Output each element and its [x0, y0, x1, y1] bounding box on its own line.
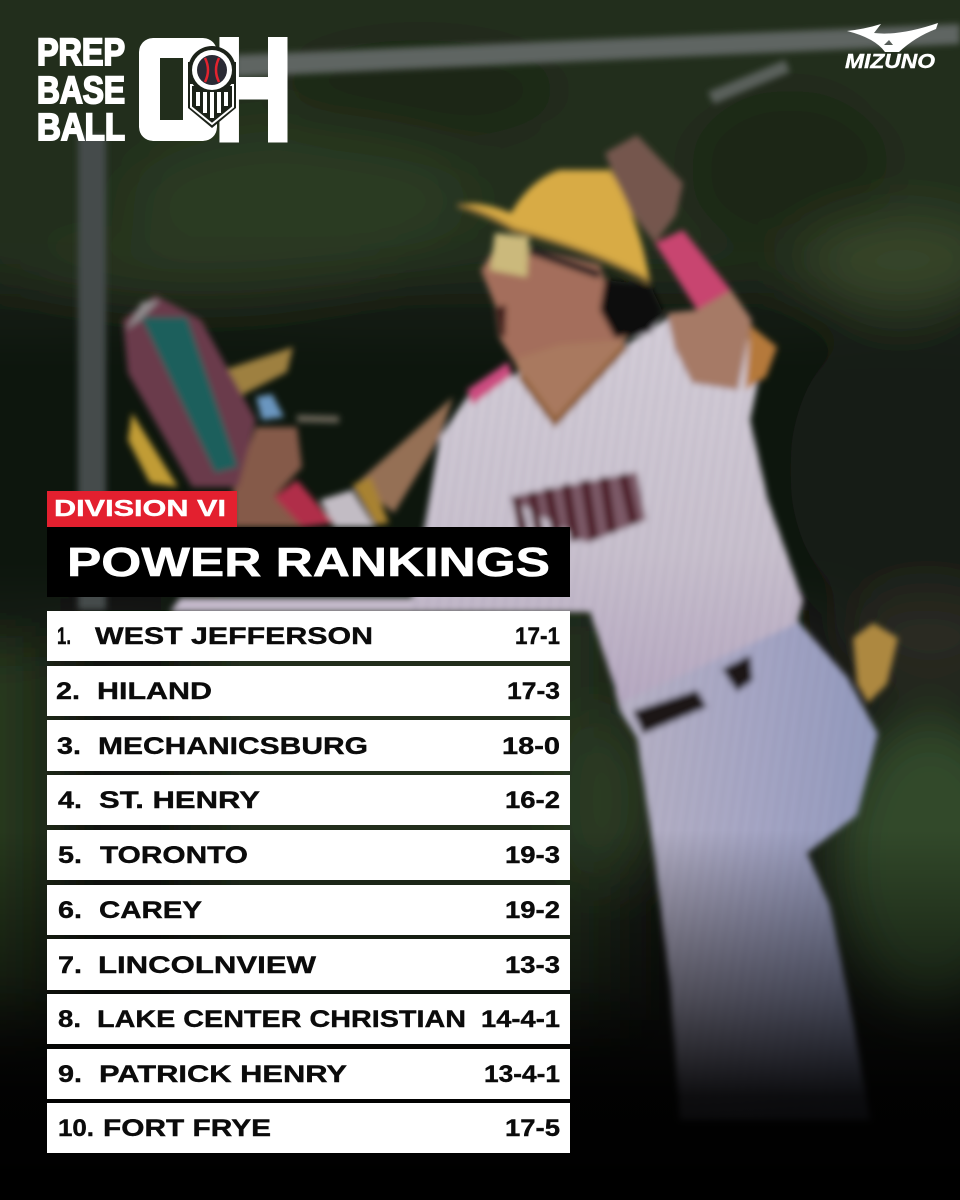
rank 10 row: FORT FRYE [103, 1115, 271, 1142]
rank 6 row: 19-2 [505, 897, 560, 924]
division label: DIVISION VI [54, 495, 226, 521]
rank 10 row: 17-5 [505, 1115, 560, 1142]
fence poles [78, 24, 960, 610]
rank 5 row: TORONTO [100, 842, 248, 869]
rank 4 row: ST. HENRY [99, 787, 260, 814]
rank 1 row: WEST JEFFERSON [95, 623, 373, 650]
icon: baseball shield [188, 46, 236, 128]
rank 7 row: 7. [58, 952, 82, 979]
division label [47, 491, 237, 527]
jersey [170, 317, 803, 703]
logo: Mizuno [845, 23, 938, 73]
rank 6 row [47, 885, 570, 935]
rank 5 row: 19-3 [505, 842, 560, 869]
rank 6 row: 6. [58, 897, 82, 924]
player figure [123, 135, 898, 1120]
rank 7 row: 13-3 [505, 952, 560, 979]
neck and collar [510, 330, 630, 424]
face [481, 240, 623, 360]
rank 2 row: 2. [56, 678, 80, 705]
rank 5 row: 5. [58, 842, 82, 869]
logo: Prep Baseball OH: BALL [37, 107, 125, 149]
rankings table [47, 611, 570, 1153]
lettering smudge [509, 472, 646, 543]
hair [600, 280, 662, 338]
rank 1 row: 1. [57, 623, 71, 650]
glove [123, 295, 256, 487]
rank 7 row: LINCOLNVIEW [98, 952, 317, 979]
rank 1 row [47, 611, 570, 661]
rank 5 row [47, 830, 570, 880]
logo: Mizuno: MIZUNO [845, 51, 935, 73]
glove arm [357, 397, 453, 513]
logo: Prep Baseball OH [38, 37, 288, 142]
rank 9 row: 13-4-1 [484, 1061, 560, 1088]
rank 9 row [47, 1049, 570, 1099]
logo: Prep Baseball OH: H [214, 8, 293, 171]
rank 3 row [47, 720, 570, 771]
rank 2 row: 17-3 [507, 678, 560, 705]
sunglasses [490, 233, 529, 277]
hand [605, 135, 683, 243]
logo: Prep Baseball OH: BASE [37, 70, 125, 112]
rank 3 row: 3. [57, 733, 81, 760]
raised arm [667, 290, 752, 390]
rank 8 row: 8. [58, 1006, 81, 1033]
heading: power rankings [47, 527, 570, 597]
rank 4 row: 4. [58, 787, 82, 814]
rank 2 row [47, 666, 570, 716]
rank 3 row: MECHANICSBURG [98, 733, 368, 760]
rank 8 row [47, 994, 570, 1044]
rank 10 row: 10. [58, 1115, 94, 1142]
rank 1 row: 17-1 [515, 623, 560, 650]
rank 9 row: PATRICK HENRY [99, 1061, 347, 1088]
rank 8 row: LAKE CENTER CHRISTIAN [97, 1006, 466, 1033]
rank 7 row [47, 939, 570, 990]
heading: power rankings: POWER RANKINGS [67, 539, 550, 585]
rank 6 row: CAREY [99, 897, 202, 924]
yellow object [853, 623, 898, 703]
cap [458, 170, 650, 282]
rank 2 row: HILAND [97, 678, 212, 705]
rank 4 row [47, 775, 570, 825]
bottom fade to black [0, 830, 960, 1200]
rank 3 row: 18-0 [502, 733, 560, 760]
rank 4 row: 16-2 [505, 787, 560, 814]
wristband [655, 230, 731, 310]
pants [615, 620, 878, 1120]
second player cap [128, 413, 178, 487]
logo: Prep Baseball OH: PREP [37, 32, 125, 74]
rank 9 row: 9. [58, 1061, 82, 1088]
logo: Prep Baseball OH: 0 [137, 8, 219, 171]
belt [633, 690, 707, 734]
rank 8 row: 14-4-1 [481, 1006, 560, 1033]
rank 10 row [47, 1103, 570, 1153]
